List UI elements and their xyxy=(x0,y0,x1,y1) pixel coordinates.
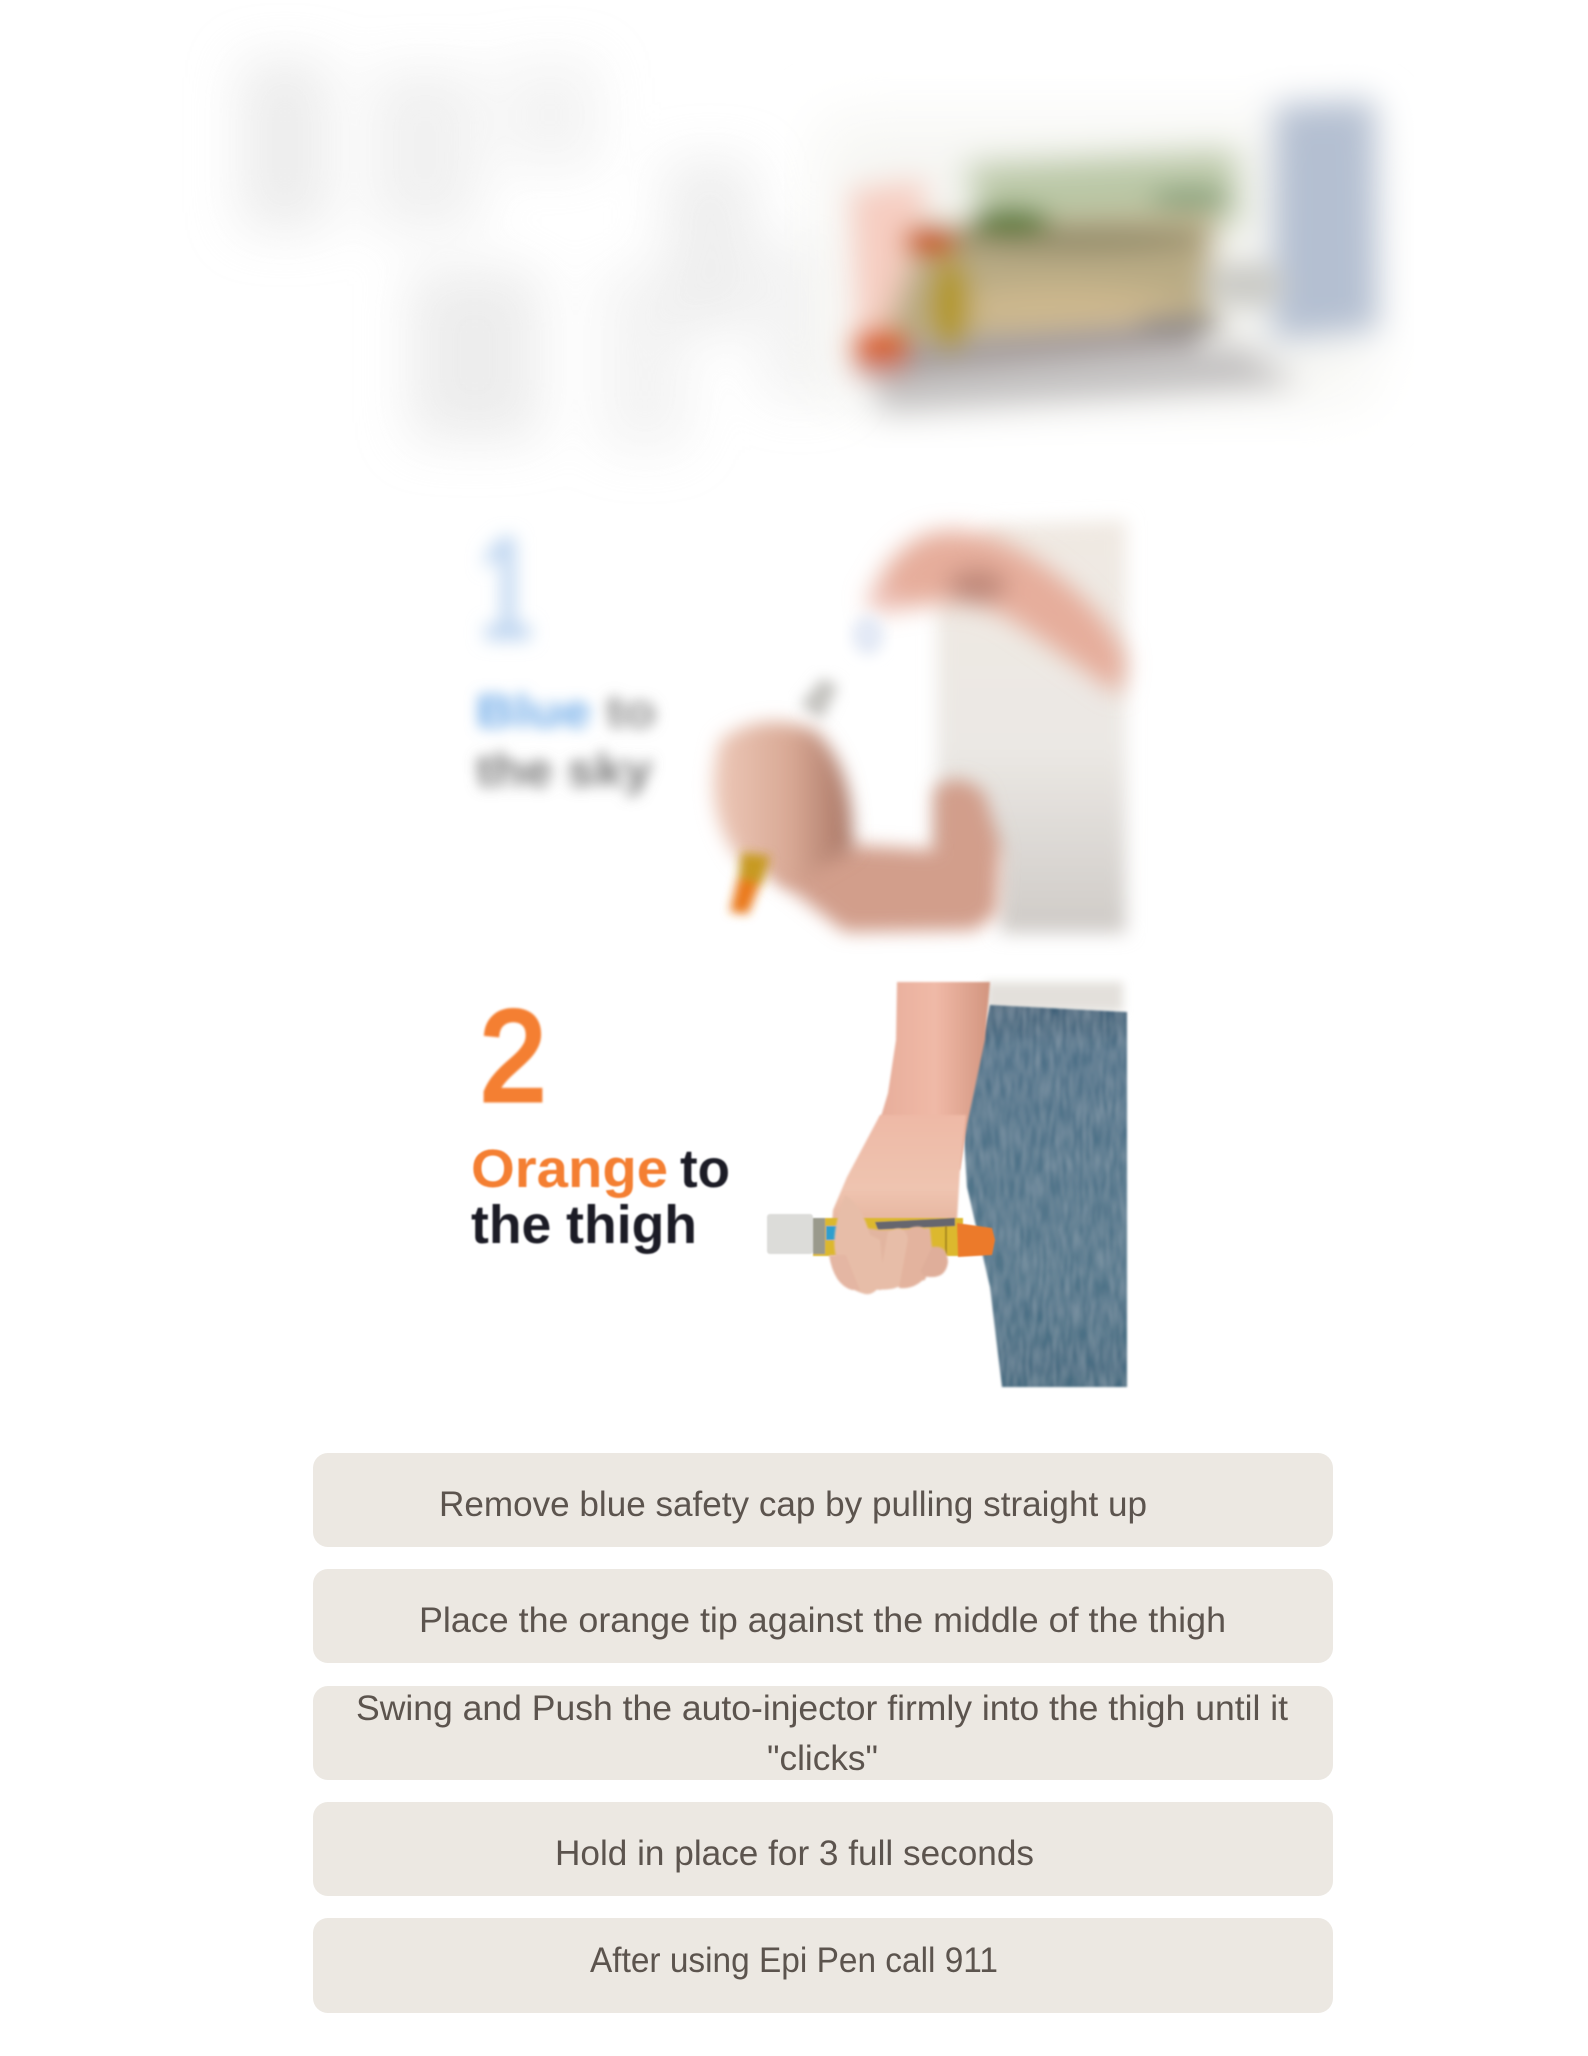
jeans leg xyxy=(963,1005,1127,1387)
step list xyxy=(313,1453,1333,2013)
step box: call 911 xyxy=(313,1918,1333,2013)
raised arm holding blue cap xyxy=(867,531,1126,695)
caption: Blue to the sky: Blue to xyxy=(476,685,656,737)
forearm xyxy=(880,982,990,1170)
step box: remove cap: Remove blue safety cap by pulling straight up xyxy=(439,1485,1147,1524)
blurred handwritten title xyxy=(240,60,840,450)
thumb xyxy=(834,1195,884,1294)
caption: Blue to the sky xyxy=(476,685,656,796)
clear cap xyxy=(767,1214,813,1254)
caption: Orange to the thigh: Orange xyxy=(471,1139,668,1199)
fingers around the injector xyxy=(829,1195,948,1294)
injector barrel top xyxy=(800,678,838,720)
ring finger xyxy=(921,1247,948,1277)
yellow body xyxy=(813,1218,963,1256)
EpiPen auto-injector xyxy=(767,1214,995,1257)
blurred EpiPen product photo xyxy=(820,100,1378,412)
index finger xyxy=(878,1228,910,1290)
shirt hem xyxy=(985,982,1123,1012)
fist xyxy=(713,722,852,885)
step box: place tip: Place the orange tip against the middle of the thigh xyxy=(419,1601,1226,1640)
step box: swing and push xyxy=(313,1686,1333,1780)
shirt and torso xyxy=(937,520,1126,933)
caption: Orange to the thigh: the thigh xyxy=(471,1195,697,1255)
step box: hold xyxy=(313,1802,1333,1896)
blurred title and EpiPen trainer header image xyxy=(240,60,1378,450)
step box: hold: Hold in place for 3 full seconds xyxy=(555,1834,1034,1873)
panel: step 2 orange to the thigh xyxy=(471,982,1127,1387)
middle finger xyxy=(899,1226,931,1288)
caption: Orange to the thigh xyxy=(471,1139,730,1255)
step number 2: 2 xyxy=(480,985,546,1128)
step box: place tip xyxy=(313,1569,1333,1663)
blue safety cap xyxy=(852,615,884,655)
orange injector tip xyxy=(730,852,770,914)
step box: remove cap xyxy=(313,1453,1333,1547)
lower arm and elbow xyxy=(750,780,1001,932)
caption: Blue to the sky: the sky xyxy=(476,744,652,796)
step number 1: 1 xyxy=(479,504,533,672)
orange needle tip xyxy=(957,1223,995,1257)
step box: call 911: After using Epi Pen call 911 xyxy=(590,1941,998,1980)
caption: Orange to the thigh: to xyxy=(680,1139,730,1199)
step box: swing and push: "clicks" xyxy=(767,1739,878,1778)
label detail xyxy=(945,1226,947,1254)
finger base xyxy=(845,1225,933,1290)
panel: step 1 blue to the sky xyxy=(476,504,1126,933)
step box: swing and push: Swing and Push the auto-injector firmly into the thigh until it xyxy=(356,1689,1288,1728)
little finger xyxy=(829,1255,860,1290)
palm xyxy=(830,1115,966,1262)
grey top of barrel xyxy=(875,1218,955,1230)
